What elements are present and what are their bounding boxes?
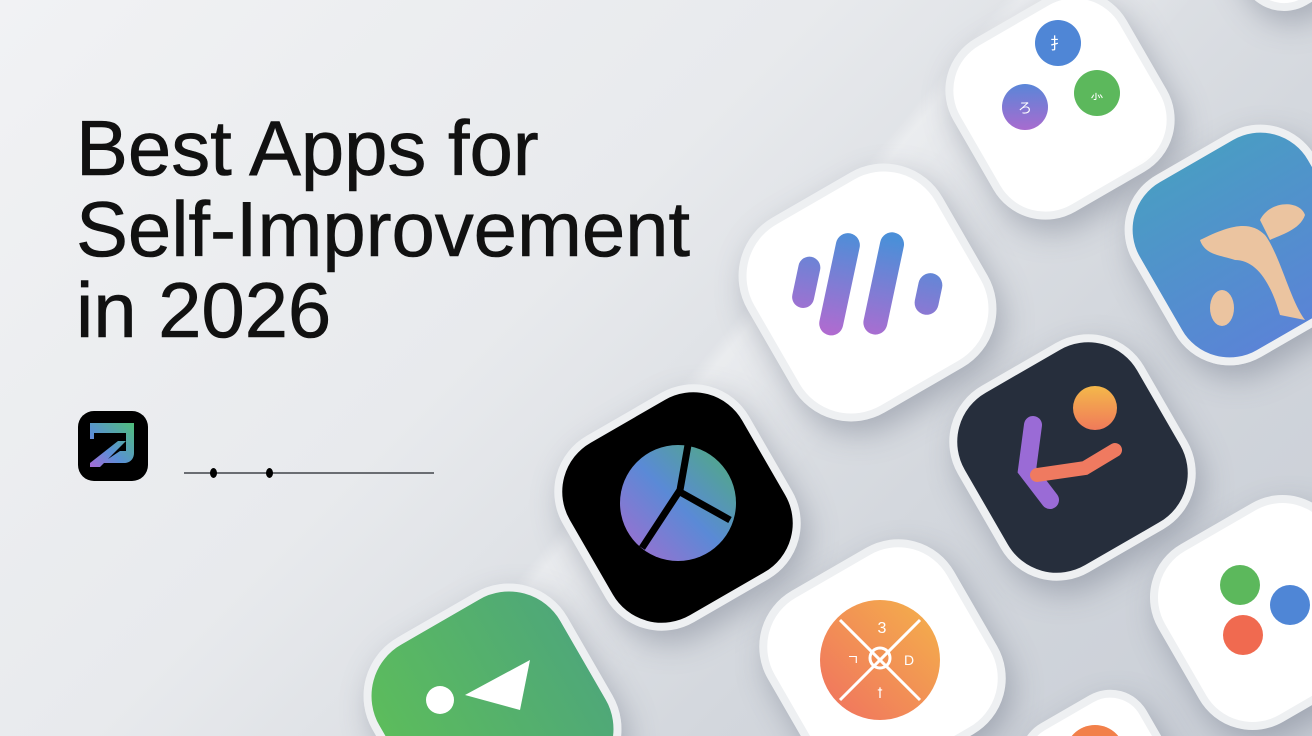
- icon: orange dial: 3: [878, 620, 887, 637]
- icon: orange dial: [754, 539, 1026, 736]
- slider line: [184, 472, 434, 474]
- icon: blue figure: [1119, 124, 1312, 390]
- icon: right white: [1144, 494, 1312, 736]
- icon: three circles: ⺘: [1050, 35, 1066, 53]
- title: [76, 104, 690, 354]
- icon: bottom partial orange: [1027, 690, 1176, 736]
- icon: dark figure: [944, 334, 1216, 606]
- icon: green: [357, 582, 641, 736]
- icon: orange dial: ꝉ: [877, 685, 883, 701]
- icon: orange dial: D: [904, 652, 914, 668]
- icon: bars: [732, 161, 1016, 446]
- icon: three circles: ⺗: [1090, 86, 1104, 102]
- icon: three circles: [938, 0, 1194, 244]
- icon: black circle: [548, 383, 820, 656]
- title: in 2026: [76, 266, 331, 354]
- title: Self-Improvement: [76, 185, 690, 273]
- icon: orange dial: ㄱ: [847, 652, 859, 668]
- title: Best Apps for: [76, 104, 539, 192]
- logo icon: [78, 411, 148, 481]
- icon: three circles: ろ: [1018, 100, 1032, 116]
